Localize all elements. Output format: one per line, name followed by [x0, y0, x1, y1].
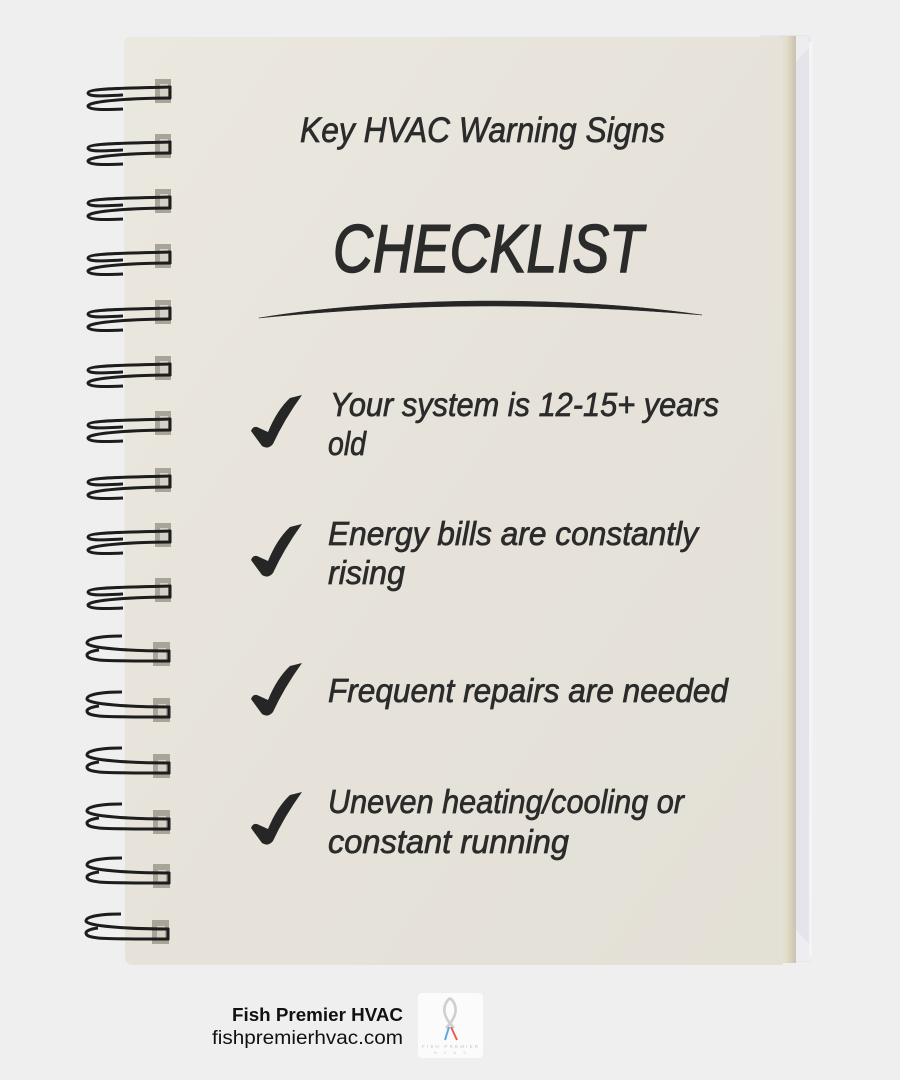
item 2 text: rising — [328, 554, 406, 591]
checklist item 4 — [251, 783, 686, 860]
notebook back cover — [760, 35, 813, 962]
checklist item 3 — [251, 663, 730, 716]
spiral binding — [86, 79, 171, 944]
heading: CHECKLIST — [333, 211, 647, 287]
notebook front page — [124, 37, 783, 965]
checklist item 2 — [251, 515, 700, 591]
item 1 text — [328, 386, 719, 462]
subtitle: Key HVAC Warning Signs — [300, 111, 665, 150]
item 4 text: constant running — [328, 823, 570, 860]
footer company text: fishpremierhvac.com — [212, 1028, 403, 1049]
item 4 text: Uneven heating/cooling or — [328, 783, 686, 820]
icon: check mark 4 — [251, 792, 302, 845]
heading underline — [259, 301, 702, 318]
logo — [418, 993, 483, 1058]
logo: FISH PREMIER — [422, 1044, 479, 1049]
checklist item 1 — [251, 386, 719, 462]
item 3 text: Frequent repairs are needed — [328, 672, 730, 709]
footer company text — [212, 1005, 403, 1049]
logo: HVAC — [434, 1051, 466, 1055]
item 2 text — [328, 515, 700, 591]
item 1 text: old — [328, 425, 367, 462]
icon: check mark 2 — [251, 524, 302, 577]
item 4 text — [328, 783, 686, 860]
item 2 text: Energy bills are constantly — [328, 515, 700, 552]
icon: check mark 1 — [251, 395, 302, 448]
footer company text: Fish Premier HVAC — [232, 1005, 403, 1025]
icon: check mark 3 — [251, 663, 302, 716]
notebook page stack edge — [780, 36, 796, 963]
item 1 text: Your system is 12-15+ years — [330, 386, 719, 423]
